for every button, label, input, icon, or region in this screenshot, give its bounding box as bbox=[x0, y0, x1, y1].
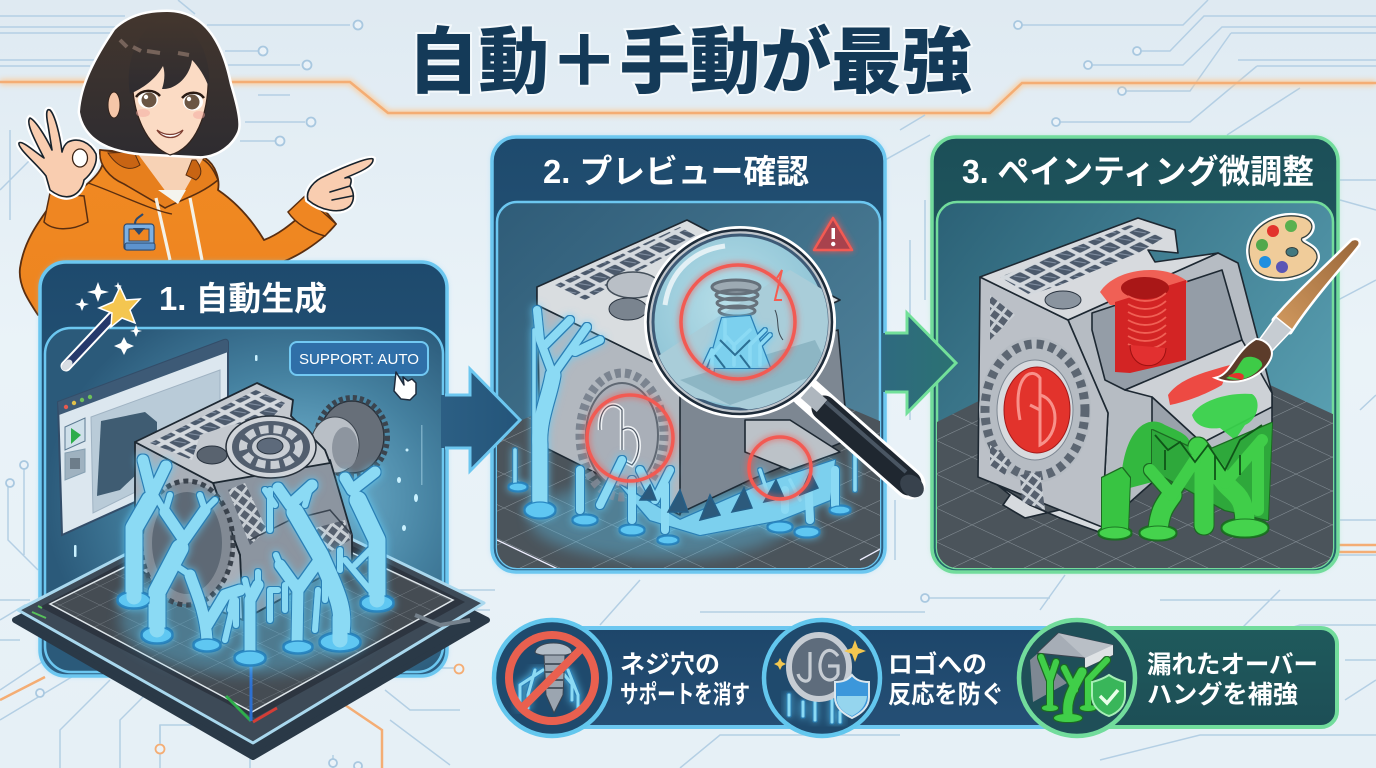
bangs bbox=[129, 18, 209, 94]
red brush stroke bbox=[1168, 365, 1230, 405]
face bbox=[133, 45, 208, 155]
tip 3 text bbox=[1147, 651, 1318, 709]
bar: green section bbox=[1060, 628, 1337, 727]
panel 3: painting adjust bbox=[932, 137, 1359, 572]
build plate bbox=[15, 490, 487, 757]
rear gear bbox=[311, 398, 387, 476]
tip 2 text: 反応を防ぐ bbox=[888, 681, 1004, 709]
tip 3 icon: reinforce overhang bbox=[1019, 620, 1135, 736]
SUPPORT AUTO button bbox=[290, 342, 428, 375]
tip 1 icon: no screw hole support bbox=[494, 620, 610, 736]
block faces bbox=[135, 383, 352, 620]
smile bbox=[157, 130, 183, 138]
tip 3 text: 漏れたオーバー bbox=[1147, 651, 1318, 679]
hand: OK sign bbox=[19, 110, 96, 197]
tip 1 text: サポートを消す bbox=[620, 681, 750, 709]
block bbox=[537, 220, 848, 515]
panel 1 inner bbox=[45, 328, 443, 672]
panel 2 heading: 2. プレビュー確認 bbox=[543, 153, 809, 190]
tip 2 icon: logo protection bbox=[764, 620, 880, 736]
icon: magic wand bbox=[65, 282, 142, 367]
base feet bbox=[997, 486, 1101, 532]
character: woman in orange hoodie bbox=[19, 12, 373, 315]
bar: blue section bbox=[540, 628, 1080, 727]
hoodie body bbox=[20, 150, 336, 315]
arrow 1 bbox=[441, 369, 520, 471]
blue supports bbox=[509, 310, 855, 544]
panel 1: auto generate bbox=[40, 262, 447, 676]
model with blue tree supports bbox=[118, 383, 393, 675]
bottom tips bar bbox=[494, 620, 1337, 736]
red threaded hole bbox=[1100, 270, 1188, 373]
panel 2 inner bbox=[497, 202, 880, 568]
panel 2: preview check bbox=[492, 137, 928, 572]
tip 2 text bbox=[888, 650, 1004, 709]
sleeve cuffs bbox=[44, 193, 336, 236]
slicer window bbox=[58, 340, 228, 535]
icon: hand cursor bbox=[394, 372, 416, 400]
block bbox=[978, 218, 1272, 527]
panel 3 heading: 3. ペインティング微調整 bbox=[962, 153, 1314, 190]
axes gizmo bbox=[226, 665, 277, 722]
red highlight circles bbox=[587, 265, 811, 499]
green paint bbox=[1122, 394, 1258, 490]
glowing particles bbox=[74, 355, 422, 557]
panel 1 heading: 1. 自動生成 bbox=[159, 280, 327, 317]
ear bbox=[108, 92, 120, 118]
tip 3 text: ハングを補強 bbox=[1147, 680, 1298, 709]
arrow 2 bbox=[882, 313, 956, 413]
title: 自動＋手動が最強 bbox=[408, 23, 972, 103]
magnified threaded hole bbox=[712, 280, 760, 316]
panel 2 illustration bbox=[497, 220, 882, 570]
bang highlights bbox=[120, 40, 189, 55]
printer badge bbox=[124, 214, 155, 250]
eye right bbox=[182, 93, 204, 110]
green supports bbox=[1099, 423, 1272, 540]
tip 1 text: ネジ穴の bbox=[620, 651, 720, 679]
blue support trees bbox=[118, 460, 393, 665]
gear logo bbox=[580, 373, 664, 497]
tip 2 text: ロゴへの bbox=[888, 650, 987, 679]
magnifying glass bbox=[644, 226, 928, 502]
front gear bbox=[141, 481, 233, 605]
blush bbox=[136, 109, 205, 119]
panel 3 illustration bbox=[937, 218, 1335, 570]
panel 3 inner bbox=[937, 202, 1333, 568]
gear with red logo bbox=[979, 337, 1091, 483]
icon: paint palette bbox=[1249, 216, 1317, 278]
icon: warning triangle bbox=[814, 218, 852, 250]
icon: paint brush bbox=[1218, 240, 1359, 381]
SUPPORT AUTO button: SUPPORT: AUTO bbox=[299, 352, 419, 368]
eye left bbox=[136, 91, 160, 108]
hand: pointing bbox=[307, 159, 373, 211]
hair back bbox=[80, 12, 238, 156]
hood and collar bbox=[88, 150, 218, 260]
tip 1 text bbox=[620, 651, 750, 709]
